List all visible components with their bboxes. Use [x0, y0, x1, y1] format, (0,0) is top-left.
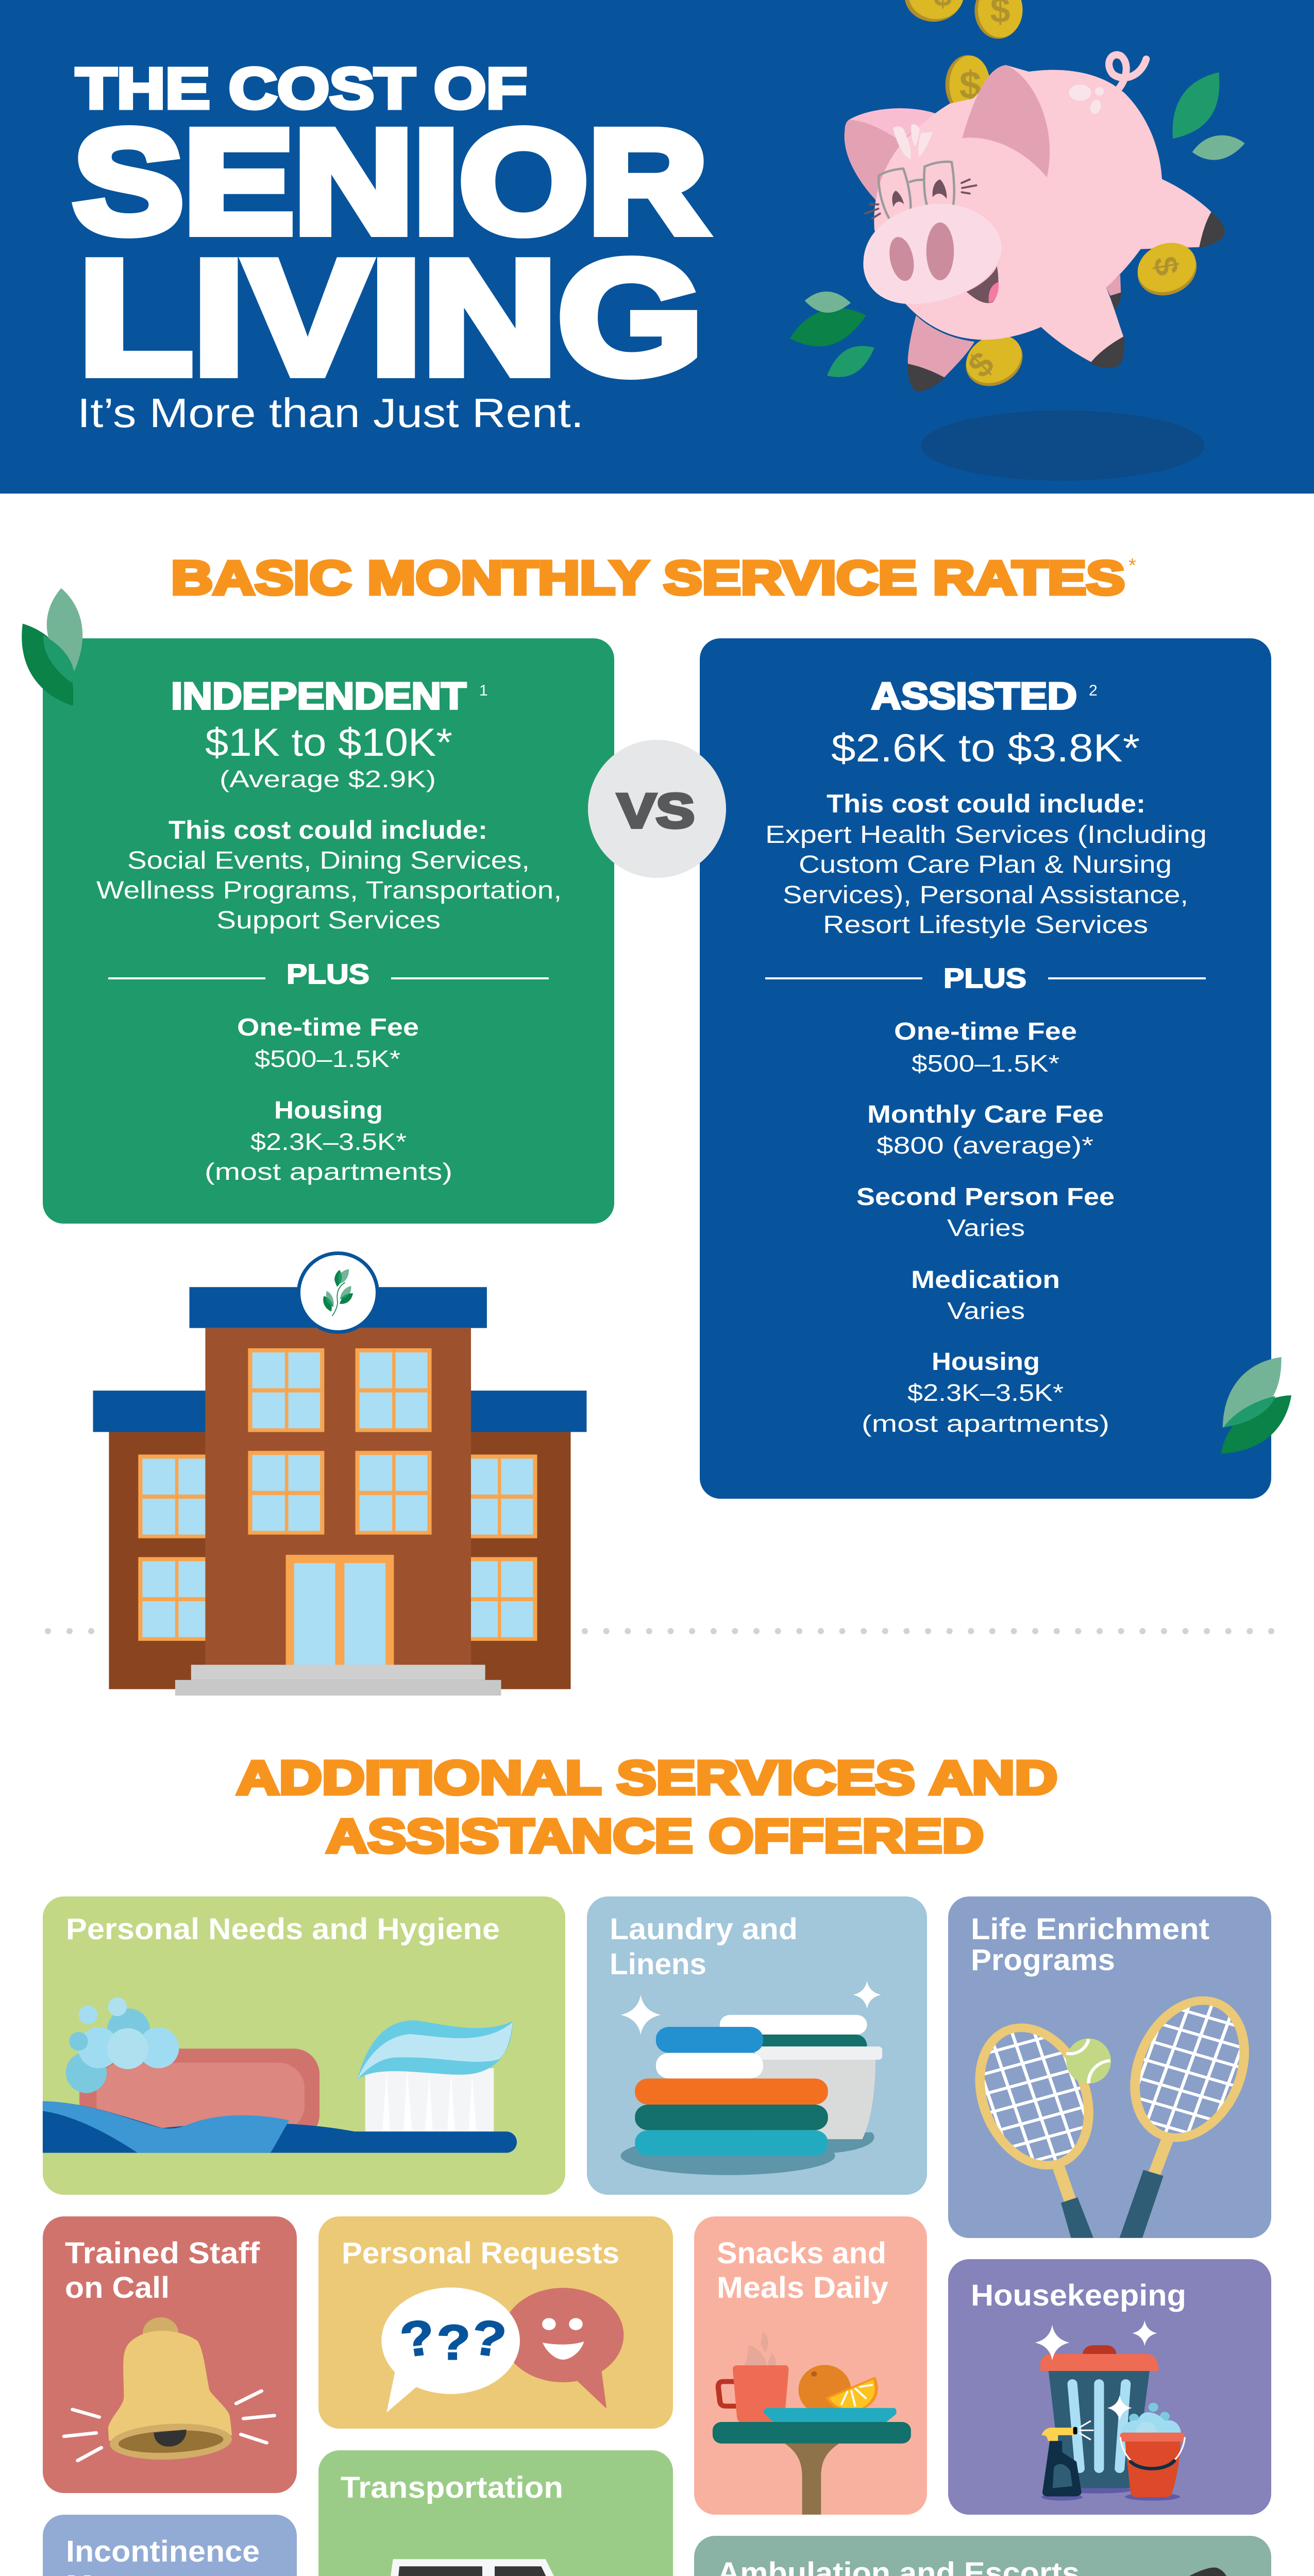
panel: header banner	[0, 0, 1314, 494]
title: the cost of senior living: SENIOR	[73, 100, 707, 264]
assisted text: $2.6K to $3.8K*	[831, 726, 1140, 770]
card title: Transportation	[341, 2471, 563, 2504]
card title: Incontinence	[66, 2535, 260, 2568]
card: personal requests	[318, 2216, 673, 2429]
icon: speech bubbles: ?	[397, 2309, 439, 2368]
icon: soap and toothbrush	[43, 1997, 517, 2153]
card: personal needs and hygiene	[43, 1896, 565, 2195]
icon: footprints	[833, 2567, 1228, 2576]
assisted text: One-time Fee	[894, 1018, 1077, 1045]
card title: Programs	[971, 1943, 1115, 1977]
card: housekeeping	[948, 2259, 1271, 2515]
card: life enrichment programs	[948, 1896, 1271, 2238]
title: the cost of senior living	[73, 56, 707, 408]
card title: Linens	[610, 1947, 706, 1981]
assisted text: PLUS	[944, 963, 1026, 994]
assisted text	[765, 675, 1207, 1437]
card title	[610, 1912, 798, 1981]
assisted text: $2.3K–3.5K*	[907, 1379, 1064, 1406]
heading: basic monthly service rates: BASIC MONTHLY SERVICE RATES	[171, 552, 1125, 604]
card title	[717, 2236, 888, 2304]
card: transportation	[318, 2450, 673, 2576]
card title: Snacks and	[717, 2236, 886, 2270]
decorative leaves top left	[22, 588, 82, 706]
independent text: PLUS	[287, 959, 369, 990]
title: the cost of senior living: THE COST OF	[76, 56, 527, 121]
badge: vs	[588, 740, 726, 878]
card title	[971, 1912, 1209, 1977]
assisted text: Monthly Care Fee	[867, 1101, 1104, 1128]
card: snacks and meals daily	[694, 2216, 927, 2515]
assisted text: This cost could include:	[827, 789, 1145, 818]
icon: speech bubbles: ?	[468, 2309, 510, 2368]
assisted text: (most apartments)	[862, 1410, 1109, 1437]
independent text: Wellness Programs, Transportation,	[96, 877, 562, 904]
independent text: (most apartments)	[205, 1158, 452, 1185]
card title: Life Enrichment	[971, 1912, 1209, 1946]
assisted text: Medication	[911, 1266, 1060, 1294]
independent text: This cost could include:	[169, 816, 487, 844]
assisted text: Varies	[947, 1214, 1025, 1241]
card title: Housekeeping	[971, 2279, 1186, 2312]
card: incontinence management	[43, 2515, 297, 2576]
icon: white van	[344, 2559, 621, 2576]
badge: vs: VS	[617, 784, 695, 838]
assisted text: Housing	[932, 1348, 1040, 1376]
independent text: Support Services	[216, 907, 441, 934]
icon: speech bubbles	[381, 2287, 624, 2413]
card title: Laundry and	[610, 1912, 798, 1946]
assisted text: Varies	[947, 1297, 1025, 1324]
heading: additional services and assistance offered: ASSISTANCE OFFERED	[326, 1810, 984, 1862]
illustration: flying piggy bank with coins and leaves: $	[959, 63, 981, 107]
icon: ringing bell	[64, 2317, 274, 2462]
icon: stacked towels and basket	[620, 1981, 882, 2175]
card title: Personal Requests	[342, 2236, 619, 2270]
independent text: $500–1.5K*	[255, 1045, 400, 1072]
assisted text: Custom Care Plan & Nursing	[799, 851, 1172, 878]
building leaf sign	[297, 1251, 379, 1334]
assisted text: $500–1.5K*	[912, 1050, 1059, 1077]
independent text: One-time Fee	[237, 1014, 419, 1041]
assisted text: $800 (average)*	[877, 1132, 1093, 1159]
independent text: 1	[479, 682, 488, 699]
icon: tennis rackets and ball	[975, 1996, 1249, 2238]
panel: independent living	[22, 588, 614, 1224]
title: the cost of senior living: LIVING	[78, 227, 703, 408]
illustration: senior living building	[93, 1251, 586, 1696]
illustration: flying piggy bank with coins and leaves	[790, 0, 1245, 481]
decorative leaves lower right	[1221, 1357, 1291, 1453]
independent text: Housing	[274, 1097, 383, 1124]
card title	[65, 2236, 260, 2304]
assisted text: Resort Lifestyle Services	[823, 911, 1148, 939]
illustration: flying piggy bank with coins and leaves: $	[961, 344, 1002, 385]
card: laundry and linens	[587, 1896, 927, 2195]
card: trained staff on call	[43, 2216, 297, 2493]
heading: additional services and assistance offered	[237, 1752, 1057, 1862]
icon: speech bubbles: ?	[436, 2315, 470, 2370]
heading: basic monthly service rates: *	[1128, 555, 1136, 577]
panel: assisted living	[700, 638, 1291, 1499]
assisted text: Expert Health Services (Including	[765, 821, 1207, 849]
illustration: flying piggy bank with coins and leaves: $	[1147, 253, 1186, 278]
card: ambulation and escorts	[694, 2536, 1271, 2576]
icon: mug, orange and table	[713, 2332, 911, 2515]
card title: Trained Staff	[65, 2236, 260, 2270]
subtitle: It’s More than Just Rent.	[77, 390, 584, 436]
independent text: Social Events, Dining Services,	[127, 847, 530, 874]
heading: additional services and assistance offered: ADDITIONAL SERVICES AND	[237, 1752, 1057, 1804]
independent text	[96, 675, 562, 1185]
independent text: (Average $2.9K)	[220, 766, 436, 792]
card title: on Call	[65, 2271, 170, 2304]
independent text: INDEPENDENT	[171, 675, 466, 717]
card title: Meals Daily	[717, 2271, 888, 2304]
assisted text: Second Person Fee	[856, 1183, 1115, 1211]
assisted text: 2	[1089, 682, 1098, 699]
assisted text: Services), Personal Assistance,	[783, 882, 1188, 909]
icon: trash can, spray and bucket	[1035, 2320, 1185, 2501]
independent text: $2.3K–3.5K*	[250, 1128, 407, 1155]
card title: Personal Needs and Hygiene	[66, 1912, 500, 1946]
assisted text: ASSISTED	[871, 675, 1077, 717]
independent text: $1K to $10K*	[205, 721, 452, 765]
